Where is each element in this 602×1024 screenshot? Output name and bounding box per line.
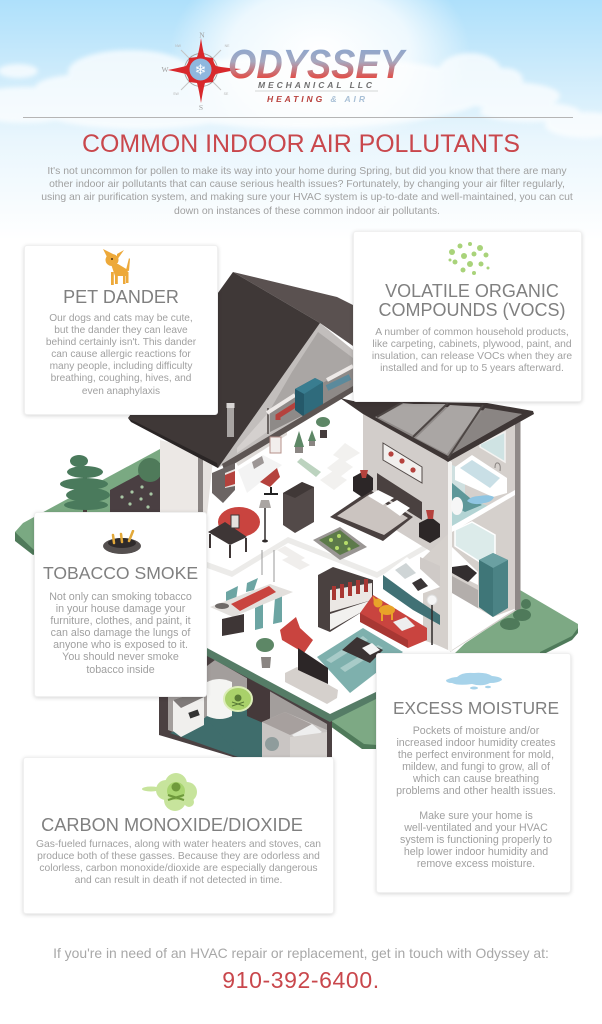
potted plant [256, 638, 274, 668]
icon: compass [161, 30, 241, 112]
tower mid slab [452, 490, 515, 532]
washer and sink [262, 712, 327, 757]
sofa [360, 595, 427, 648]
tower ground floor [452, 593, 517, 650]
heading: TOBACCO SMOKE [43, 563, 198, 583]
call to action: If you're in need of an HVAC repair or replacement, get in touch with Odyssey at: [53, 945, 549, 961]
icon: compass: ❄ [195, 62, 206, 78]
refrigerator [479, 553, 508, 617]
body text: the perfect environment for mold, [398, 749, 554, 761]
sky background with clouds [0, 0, 602, 204]
upper floor slab edge [207, 529, 452, 578]
teal rug [317, 628, 403, 693]
body text: help lower indoor humidity and [404, 846, 548, 858]
body text: Gas-fueled furnaces, along with water heaters and stoves, can [36, 839, 321, 850]
bedroom wall art [383, 443, 422, 483]
icon: compass: W [161, 65, 169, 74]
attic interior [218, 323, 353, 470]
bathroom window [480, 432, 505, 462]
attic white duct [267, 366, 353, 413]
plants on upper floor [294, 417, 330, 453]
kitchen window [455, 522, 495, 562]
armchair [280, 617, 313, 653]
body text [46, 313, 196, 397]
body text: mildew, and fungi to grow, all of [402, 761, 550, 773]
body text: colorless, carbon monoxide/dioxide are especially dangerous [39, 863, 318, 874]
body text: many people, including difficulty [50, 361, 192, 372]
attic blue duct [327, 377, 350, 388]
wardrobe [283, 482, 314, 533]
body text: and can result in death if not detected in time. [75, 875, 282, 886]
title: COMMON INDOOR AIR POLLUTANTS [82, 130, 520, 158]
panel: excess moisture [376, 653, 571, 893]
body text [372, 327, 572, 374]
logo [161, 30, 407, 112]
floor lamp [259, 500, 271, 542]
bathtub [455, 455, 507, 497]
icon: dog [103, 249, 130, 285]
nightstands with lamps [353, 470, 440, 543]
home office shelf [212, 463, 235, 503]
icon: compass: NE [225, 44, 230, 48]
intro text: down on instances of these common indoor air pollutants. [174, 206, 440, 217]
icon: toxic cloud [142, 773, 197, 811]
body text: but the dander they can leave [54, 325, 188, 336]
body text: Our dogs and cats may be cute, [49, 313, 193, 324]
body text: installed and for up to 5 years afterward. [380, 363, 564, 374]
body text: insulation, can release VOCs when they are [372, 351, 572, 362]
body text: produce both of these gasses. Because they are odorless and [37, 851, 320, 862]
basement door [247, 678, 270, 726]
tv and stand [285, 648, 338, 704]
body text: problems and other health issues. [396, 785, 556, 797]
right roof [340, 398, 534, 462]
phone number: 910-392-6400. [222, 967, 380, 993]
water puddle [467, 495, 494, 504]
intro text: other indoor air pollutants that can cause serious health issues? Fortunately, by changing your air filter regularly, [49, 179, 565, 190]
bed [330, 473, 422, 541]
logo subtitle: MECHANICAL LLC [258, 80, 373, 90]
body text: in your house damage your [56, 603, 185, 615]
intro text [41, 166, 573, 217]
icon: compass: SW [173, 92, 180, 96]
left lawn and garden [15, 449, 162, 555]
upper floor rug and stairs [297, 443, 360, 490]
basement [159, 650, 332, 757]
basement furnace [207, 679, 232, 719]
white interior floors [207, 390, 520, 718]
body text: like carpeting, cabinets, plywood, paint, and [372, 339, 572, 350]
bathroom glass side [452, 465, 465, 527]
tower: bathroom and kitchen [448, 420, 531, 652]
body text: anyone who is exposed to it. [53, 639, 188, 651]
upper-left exterior wall [160, 440, 213, 520]
icon: puddle [446, 672, 502, 690]
HVAC unit [295, 378, 323, 417]
kitchen counter [383, 557, 440, 625]
body text: increased indoor humidity creates [396, 737, 556, 749]
intro text: It's not uncommon for pollen to make its way into your home during Spring, but did you know that there are many [47, 166, 567, 177]
body text: Make sure your home is [419, 810, 533, 822]
body text: furniture, clothes, and paint, it [50, 615, 191, 627]
kitchen stove counter [452, 547, 478, 610]
body text: You should never smoke [62, 651, 179, 663]
right lawn [330, 590, 578, 749]
panel: pet dander [24, 245, 218, 415]
body text [36, 839, 321, 886]
body text: breathing, coughing, hives, and [51, 373, 191, 384]
body text: Not only can smoking tobacco [49, 591, 192, 603]
body text: even anaphylaxis [82, 386, 160, 397]
stairs to lower floor [277, 546, 310, 570]
heading: CARBON MONOXIDE/DIOXIDE [41, 815, 303, 835]
icon: compass: N [199, 30, 205, 40]
icon: VOC particles [448, 242, 490, 275]
body text: system is functioning properly to [400, 834, 552, 846]
panel: carbon monoxide/dioxide [23, 757, 334, 914]
dog on sofa [373, 596, 395, 621]
body text: Pockets of moisture and/or [413, 725, 539, 737]
picture on back wall [270, 437, 281, 453]
main roof [128, 272, 353, 468]
body text: can also damage the lungs of [51, 627, 190, 639]
icon: compass: NW [175, 44, 182, 48]
office chair [260, 468, 280, 494]
icon: compass: S [199, 103, 203, 112]
dining nook with red rug [208, 507, 260, 558]
panel: volatile organic compounds [353, 231, 582, 402]
attic red duct [278, 402, 300, 420]
intro text: using an air purification system, and making sure your HVAC system is up-to-date and well-maintained, you can cut [41, 192, 573, 203]
dining table [210, 550, 293, 636]
chimney [226, 403, 234, 437]
right bedroom wall [363, 414, 448, 562]
body text: behind certainly isn't. This dander [46, 337, 196, 348]
home office desk [238, 455, 282, 493]
bookcase [318, 567, 373, 632]
heading: PET DANDER [63, 287, 179, 307]
bathroom floor [452, 483, 513, 527]
heading: COMPOUNDS (VOCS) [378, 300, 566, 320]
main floor slab edge [207, 648, 378, 722]
living wall column [423, 534, 448, 650]
logo tagline: HEATING & AIR [267, 94, 366, 104]
coffee table [342, 637, 383, 663]
shrubs beside tower [500, 599, 531, 630]
mold rug [313, 527, 367, 560]
panel: tobacco smoke [34, 512, 207, 697]
body text: remove excess moisture. [417, 858, 535, 870]
body text: well-ventilated and your HVAC [404, 822, 548, 834]
bedroom back wall [233, 430, 287, 466]
body text [396, 725, 556, 870]
floor lamp by sofa [427, 595, 437, 645]
icon: tree [60, 455, 110, 515]
toilet [451, 497, 463, 515]
body text: which can cause breathing [413, 773, 539, 785]
tower front edge [448, 460, 452, 652]
right column [515, 420, 520, 610]
body text [49, 591, 192, 676]
icon: compass: SE [224, 92, 229, 96]
heading [378, 281, 566, 320]
heading: EXCESS MOISTURE [393, 698, 559, 718]
icon: ashtray [103, 530, 141, 554]
heading: VOLATILE ORGANIC [385, 281, 559, 301]
body text: A number of common household products, [375, 327, 569, 338]
carbon monoxide cloud [224, 687, 252, 711]
basement stove [173, 692, 204, 737]
body text: can cause allergic reactions for [51, 349, 191, 360]
body text: tobacco inside [86, 664, 155, 676]
